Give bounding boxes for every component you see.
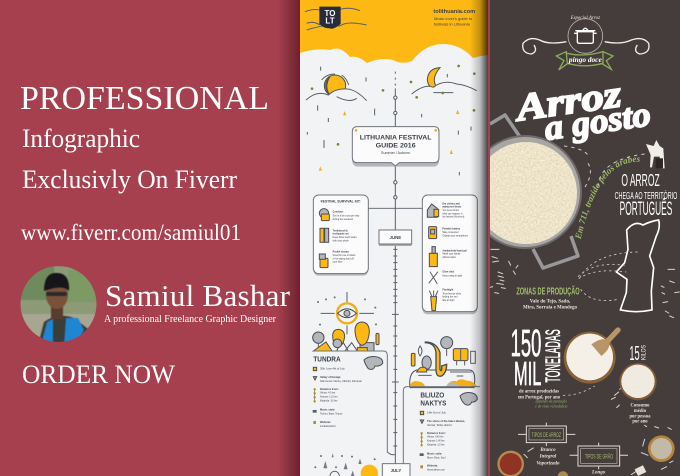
card: tundra festival: Valley of Kunigė [320,375,341,379]
heading: o arroz chega ao territorio portugues [614,174,678,215]
title: arroz a gosto: Arroz [512,73,624,130]
label: tipos de arroz: TIPOS DE ARROZ [532,432,561,439]
card: tundra festival: Music style: [320,408,335,412]
label: tipos de arroz: Branco [539,448,556,453]
card: bliuzo naktys festival: Vilnius: 3:40 hrs [427,436,444,439]
card: festival survival kit: Toothbrush & [333,230,348,233]
card: festival tips right: Portable battery [442,228,461,231]
stat: 150 mil toneladas: de arroz produzidas [519,390,559,395]
month label: june [379,230,412,246]
card: bliuzo naktys festival: Blues, Rock, Soul [427,457,446,459]
logo: tolt: TO [325,9,335,18]
card: tundra festival: Klaipėda: 3:0 hrs [320,400,338,403]
card: festival tips right: the festival (Anti-tent) [442,216,465,219]
card: tundra festival: TUNDRA [313,357,341,364]
card: bliuzo naktys festival: Music style: [427,452,442,456]
card: festival survival kit [313,195,368,276]
site info text: festivals in Lithuania [434,21,471,26]
label: tipos de arroz [518,423,575,466]
map outline: portugal [616,220,659,312]
text: consumo medio [629,404,651,424]
stat: 150 mil toneladas: MIL [514,356,541,393]
rice pot photo [490,113,582,270]
card: festival survival kit: with your whole [333,239,349,242]
logo: tolt: LT [325,16,335,25]
text: zonas de producao: Vale do Tejo, Sado, [530,300,571,305]
stat: 150 mil toneladas: (fazendo de pantação [536,400,567,404]
card: festival survival kit: Keep those teeth clean [333,236,357,239]
logo: pot badge [523,16,649,70]
timeline spine lower [387,246,399,464]
card: festival survival kit: or for wiping food off [333,257,354,260]
subheading: exclusively on fiverr: Exclusivly On Fiverr [22,165,237,194]
illustration: forest and sun [314,453,378,476]
logo: tolt [305,7,367,30]
card: festival tips right: finding the tent [442,296,458,299]
card: bliuzo naktys festival: bliuzonaktys.com [427,469,445,472]
card: tundra festival: Skirsnemė Varnių, Alkininį, Dirvėnai [320,379,362,383]
card: tundra festival: Vilnius: 4:0 hrs [320,392,336,395]
card: festival tips right: Keep using at night [442,274,463,277]
card: tundra festival: Distance from: [320,387,339,391]
card: festival survival kit: Sex in a tent can get risky [333,215,360,218]
card: festival survival kit: your face [333,261,343,264]
card: bliuzo naktys festival: NAKTYS [420,401,447,408]
illustration: tundra eye [313,292,379,351]
title: arroz a gosto [515,88,650,144]
card: festival tips right: waterproof boots [442,206,462,209]
month label: july [382,464,410,476]
heading: professional: PROFESSIONAL [20,80,269,117]
call to action: ORDER NOW [22,360,175,389]
card: festival survival kit: Great for use in toilets [333,254,356,257]
stat: 15 kilos [630,345,646,360]
page fold shadow [470,0,488,476]
card: festival tips right: without water [442,256,456,259]
card: festival survival kit: during the weekend [333,218,354,221]
logo: pot badge: pingo doce [568,55,602,64]
site info text: Music lover's guide to [434,16,473,21]
card: festival survival kit: Condoms [333,212,344,214]
panel: festival guide infographic [300,0,488,476]
timeline spine [368,72,422,230]
dashed lines and rice grains [489,249,679,475]
card: tundra festival: Kaunas: 1:10 hrs [320,396,338,399]
card: festival tips right: Trust friends while [442,292,462,295]
title card: GUIDE 2016 [376,143,416,150]
text: consumo medio: Consumo [631,404,650,409]
label: tipos de grao [570,443,628,475]
yellow header with cloud edge [300,0,488,63]
stat: 150 mil toneladas: em Portugal, por ano [518,395,561,400]
card: festival tips right: late at night [442,299,455,302]
author tagline: A professional Freelance Graphic Designer [104,314,276,325]
stat: 15 kilos: 15 [629,342,640,365]
card: festival tips right: Charge your smartphone [442,234,469,237]
card: bliuzo naktys festival: The shore of the lake Lūkstas, [427,419,465,423]
card: tundra festival: tundrafestival.lt [320,425,336,428]
card: festival tips right: Glow stick [442,271,455,274]
card: festival tips right: Dry clothes and [442,203,460,206]
card: bliuzo naktys festival: 14th-2nd of July [427,411,447,415]
title card: Summer / Autumn [381,151,410,155]
card: festival tips right: Flashlight [442,289,454,292]
panel: rice infographic: TONELADAS [541,329,565,383]
card: tundra festival: 30th June-4th of July [320,367,345,371]
card: festival tips right: what can happen in [442,212,463,215]
illustration: bliuzo saxophone [409,337,477,388]
stat: 150 mil toneladas [511,323,568,409]
card: festival tips right: Wash your hands [442,253,461,256]
card: bliuzo naktys festival: BLIUZO [420,392,445,399]
month label: june: JUNE [390,235,401,240]
card: festival survival kit: FESTIVAL SURVIVAL KIT: [321,199,361,203]
card: bliuzo naktys festival: Klaipėda: 1:0 hrs [427,444,445,447]
text: zonas de producao: ZONAS DE PRODUÇÃO [516,284,580,297]
card: bliuzo naktys festival: Distance from: [427,431,446,435]
stat: 150 mil toneladas: e de vinte variedades) [535,405,568,409]
card: bliuzo naktys festival: Varniai, Telšių district [427,423,452,427]
label: tipos de grao: TIPOS DE GRÃO [585,451,613,460]
text: zonas de producao: Mira, Sorraia e Mondego [523,306,577,311]
card: festival tips right [422,195,477,314]
card: festival survival kit: Pocket tissues [333,250,350,253]
photo: small rice bowl [619,363,657,400]
title card [352,127,439,167]
panel: left promo [0,0,300,476]
label: tipos de arroz: Integral [539,455,557,460]
card: bliuzo naktys festival [403,387,480,476]
photo: spice bowls [497,435,675,476]
photo: large rice bowl with scoop [564,330,618,384]
card: festival survival kit: toothpaste set [333,233,349,236]
card: tundra festival [313,351,387,453]
title card: LITHUANIA FESTIVAL [360,134,432,141]
text: consumo medio: por pessoa [629,414,651,419]
text: consumo medio: médio [634,409,647,414]
month label: july: JULY [391,468,401,473]
card: bliuzo naktys festival: Website: [427,464,438,468]
stat: 15 kilos: KILOS [640,345,647,360]
site info text: tolithuania.com [433,9,475,15]
author name: Samiul Bashar [105,278,291,313]
icon: knight on horse [646,140,665,168]
icon: profile portrait [20,266,98,345]
site info text [433,9,475,26]
card: tundra festival: Techno, Bass, Trance [320,413,343,416]
text: zonas de producao [516,284,580,311]
card: festival tips right: Antibacterial hand gel [442,249,467,252]
card: bliuzo naktys festival: Kaunas: 1:40 hrs [427,440,445,443]
text: consumo medio: por ano [632,419,648,424]
label: tipos de arroz: Vaporizado [536,461,560,466]
panel: rice infographic [490,0,680,476]
title: arroz a gosto: a gosto [542,94,653,148]
subheading: infographic: Infographic [22,124,140,153]
curved text: em 711 trazido pelos arabes: Em 711, trazido pelos árabes [575,156,640,240]
logo: pot badge: Especial Arroz [570,16,600,21]
illustration: sun and moon in clouds [306,65,477,175]
label: tipos de grao: Longo [591,470,606,475]
card: festival tips right: You never know [442,209,459,212]
card: tundra festival: Website: [320,420,331,424]
profile url: www.fiverr.com/samiul01 [21,220,241,245]
card: festival tips right: Stay connected [442,231,459,234]
stat: 150 mil toneladas: 150 [511,323,541,365]
